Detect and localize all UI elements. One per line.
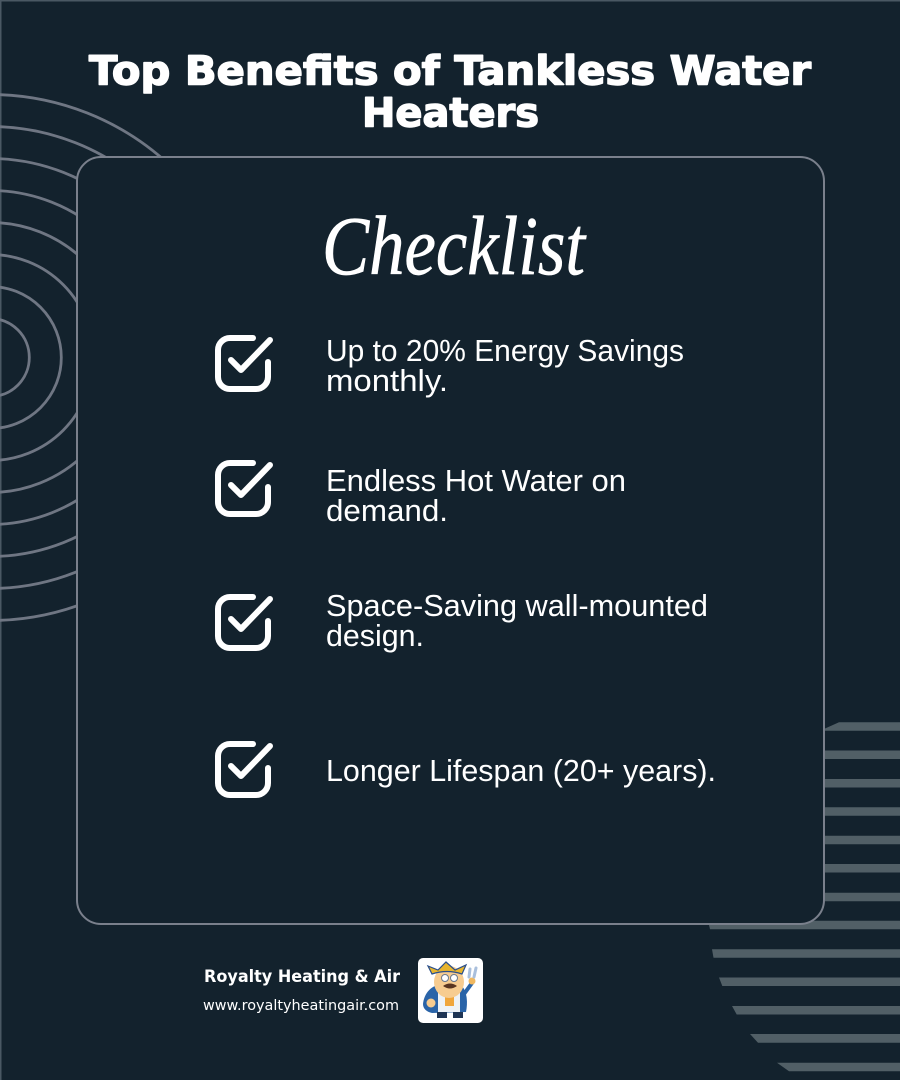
face	[434, 966, 464, 998]
panel background	[77, 157, 824, 924]
icon: company mascot logo	[418, 958, 483, 1023]
checklist item 2	[218, 463, 626, 528]
text: space saving: Space-Saving wall-mounted	[326, 589, 708, 623]
text: endless hot water: demand.	[326, 494, 448, 528]
text: space saving	[326, 589, 708, 653]
legs	[437, 1012, 463, 1018]
decorative concentric rings	[0, 94, 253, 620]
title: Top Benefits of Tankless Water	[89, 48, 811, 94]
text: longer lifespan: Longer Lifespan (20+ years).	[326, 754, 716, 788]
title: Heaters	[362, 90, 539, 136]
checklist item 4	[218, 744, 716, 795]
heading: Checklist: Checklist	[322, 200, 587, 293]
company name: Royalty Heating & Air	[204, 967, 401, 987]
icon: checkbox 1	[218, 338, 270, 389]
text: energy savings: Up to 20% Energy Savings	[326, 334, 684, 368]
text: energy savings	[326, 334, 684, 398]
text: endless hot water: Endless Hot Water on	[326, 464, 626, 498]
text: energy savings: monthly.	[326, 364, 448, 398]
icon: checkbox 3	[218, 597, 270, 648]
panel: checklist	[77, 157, 824, 924]
hand left	[426, 998, 436, 1008]
eyes and moustache	[442, 974, 448, 982]
icon: checkbox 4	[218, 744, 270, 795]
arm and wrench	[464, 983, 472, 994]
text: endless hot water	[326, 464, 626, 528]
icon: checkbox 2	[218, 463, 270, 514]
text: space saving: design.	[326, 619, 424, 653]
website: www.royaltyheatingair.com	[203, 998, 399, 1014]
checklist item 3	[218, 589, 708, 653]
robe	[423, 985, 467, 1013]
crown	[428, 962, 466, 974]
title	[89, 48, 811, 136]
footer brand	[203, 967, 401, 1014]
decorative stripes	[708, 722, 900, 1071]
checklist item 1	[218, 334, 684, 398]
